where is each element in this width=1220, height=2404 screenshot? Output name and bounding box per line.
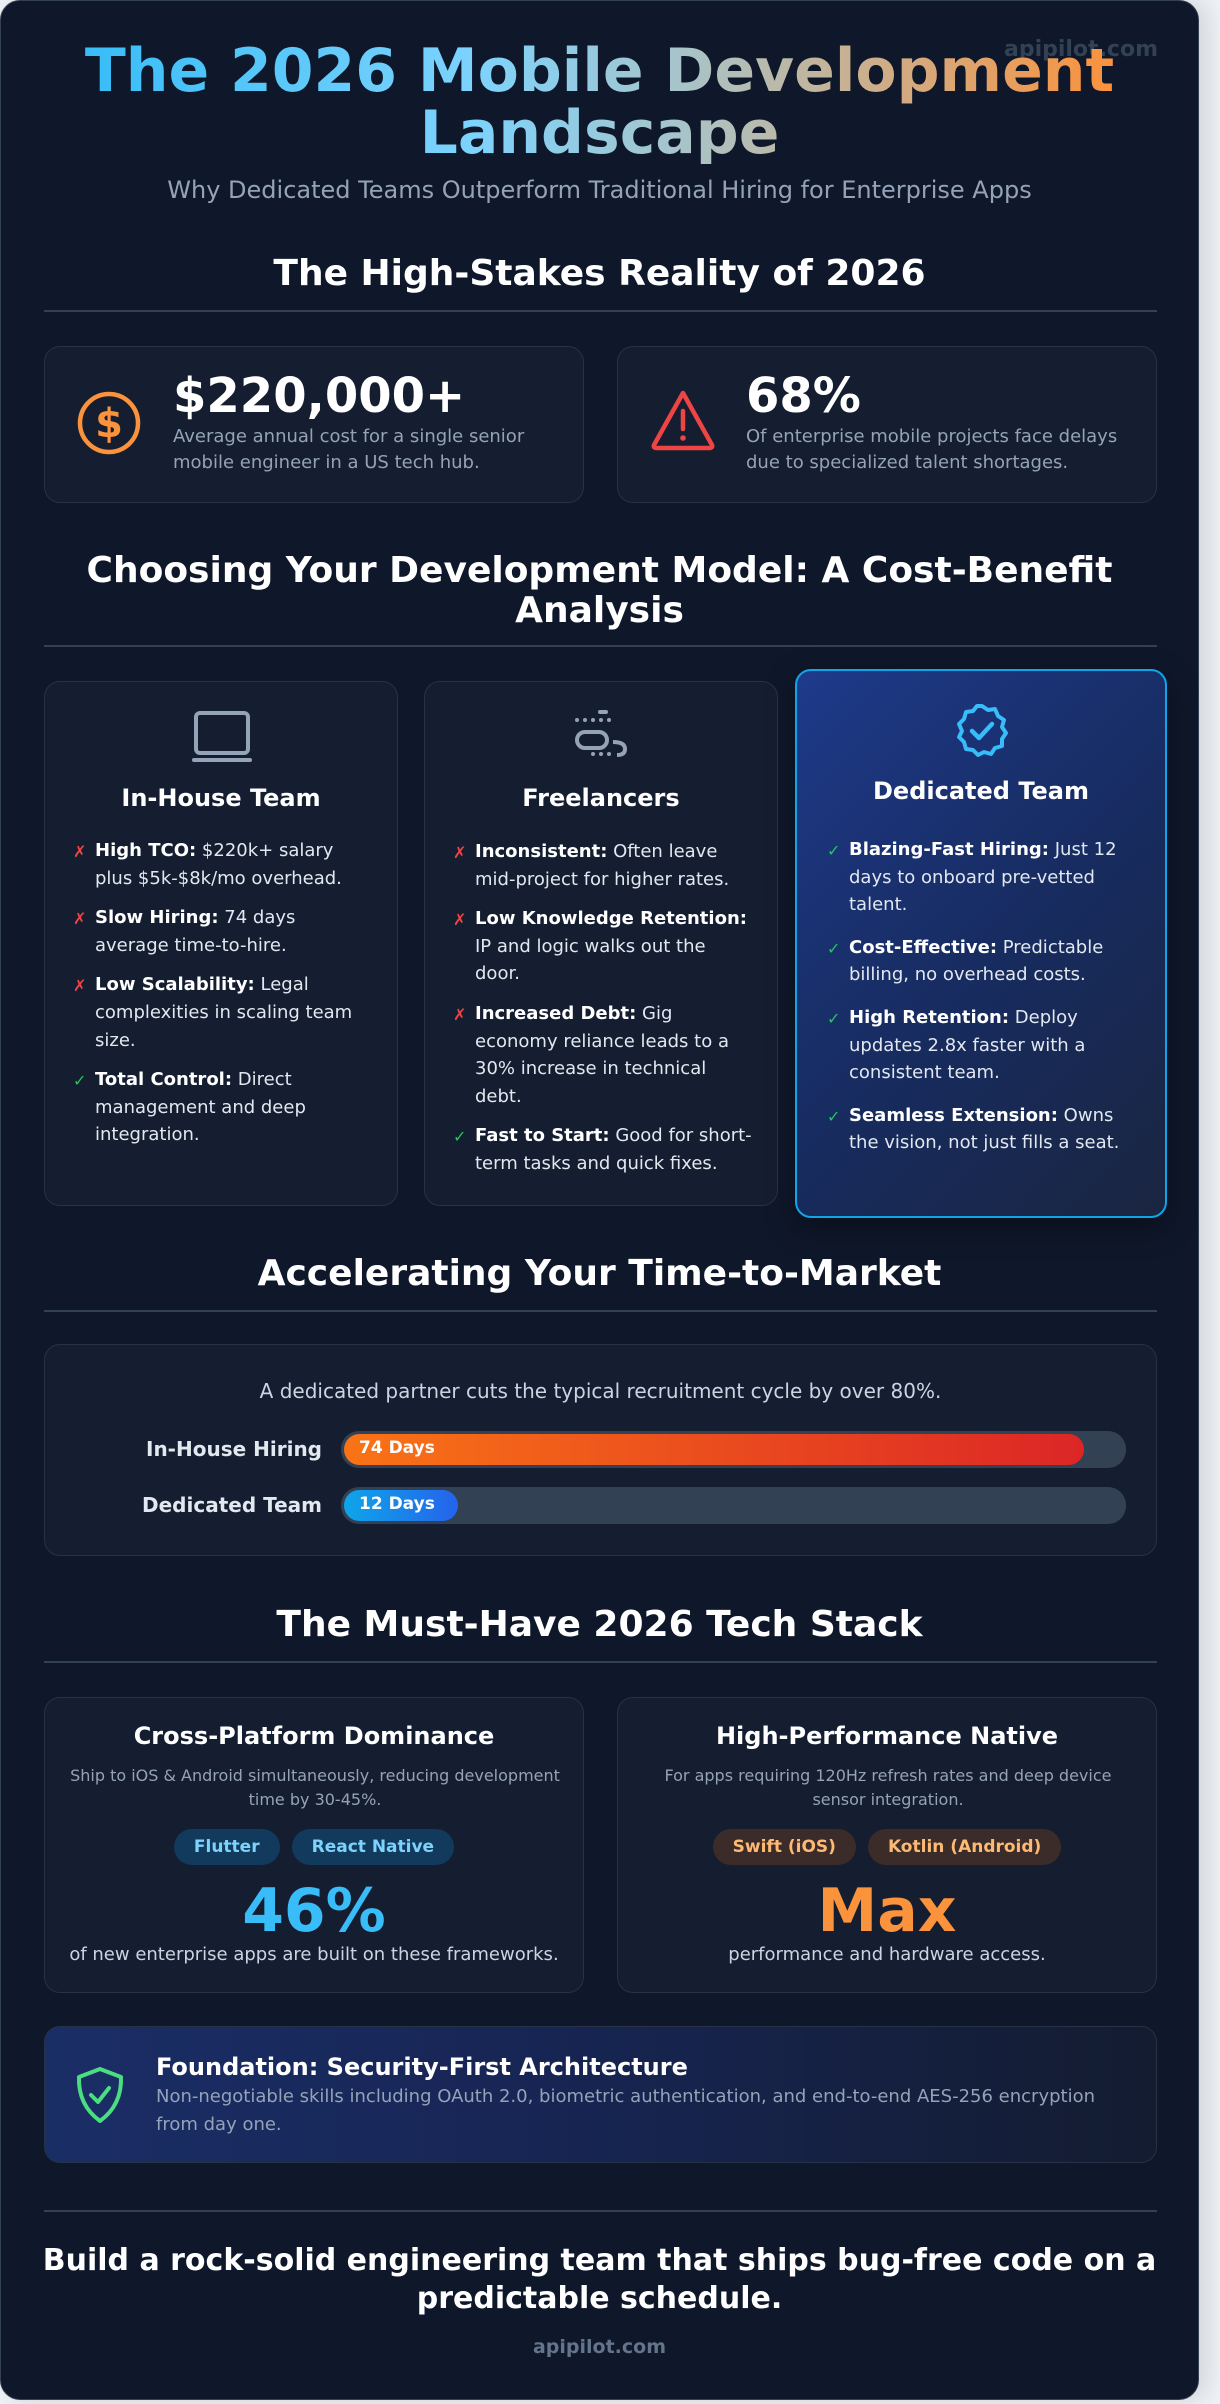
chart caption: A dedicated partner cuts the typical recruitment cycle by over 80%. <box>260 1379 941 1403</box>
description: For apps requiring 120Hz refresh rates and deep device sensor integration. <box>664 1766 1111 1809</box>
list: ✓ <box>827 1107 840 1126</box>
bar: dedicated <box>142 1487 1126 1524</box>
stat value: 68% <box>746 368 861 424</box>
list: Fast to Start: Good for short-term tasks and quick fixes. <box>475 1125 752 1174</box>
list: High TCO: $220k+ salary plus $5k-$8k/mo overhead. <box>95 840 342 889</box>
list: Total Control: Direct management and deep integration. <box>95 1069 306 1145</box>
list <box>827 839 1119 1153</box>
stat text: Average annual cost for a single senior mobile engineer in a US tech hub. <box>173 426 524 473</box>
list: Inconsistent: Often leave mid-project for higher rates. <box>475 841 729 890</box>
icon: verified badge <box>957 704 1008 757</box>
heading: cost-benefit <box>87 550 1112 631</box>
watermark: apipilot.com <box>1004 37 1158 62</box>
list: ✓ <box>453 1127 466 1146</box>
panel: in-house team <box>44 681 398 1206</box>
icon: warning <box>652 390 714 450</box>
icon: laptop <box>192 711 252 762</box>
list: ✗ <box>73 909 86 928</box>
list: ✗ <box>453 843 466 862</box>
title: Landscape <box>420 98 779 168</box>
panel: freelancers <box>424 681 778 1206</box>
closing statement: Build a rock-solid engineering team that ships bug-free code on a <box>43 2243 1156 2278</box>
title <box>85 36 1114 168</box>
title: The 2026 Mobile Development <box>85 36 1114 106</box>
heading: tech stack: The Must-Have 2026 Tech Stack <box>276 1604 923 1645</box>
panel: native <box>617 1697 1157 1993</box>
heading: high-stakes: The High-Stakes Reality of 2026 <box>273 253 926 294</box>
list: High Retention: Deploy updates 2.8x faster with a consistent team. <box>849 1007 1085 1083</box>
list: ✗ <box>73 976 86 995</box>
closing statement: predictable schedule. <box>417 2281 782 2316</box>
icon: broken link <box>575 710 627 757</box>
stat text: Of enterprise mobile projects face delays due to specialized talent shortages. <box>746 426 1117 473</box>
closing statement <box>43 2243 1156 2316</box>
list: Increased Debt: Gig economy reliance leads to a 30% increase in technical debt. <box>475 1003 729 1107</box>
list <box>73 840 352 1145</box>
list: ✓ <box>827 939 840 958</box>
panel: cross-platform <box>44 1697 584 1993</box>
heading: time-to-market: Accelerating Your Time-to-Market <box>258 1253 941 1294</box>
panel: hiring bar chart <box>44 1344 1157 1556</box>
list: Slow Hiring: 74 days average time-to-hire. <box>95 907 295 956</box>
list <box>453 841 752 1174</box>
icon: dollar: $ <box>95 401 123 447</box>
subtitle: Why Dedicated Teams Outperform Traditional Hiring for Enterprise Apps <box>167 176 1032 204</box>
list: Blazing-Fast Hiring: Just 12 days to onboard pre-vetted talent. <box>849 839 1117 915</box>
icon: dollar <box>78 392 140 454</box>
panel: security foundation <box>44 2026 1157 2163</box>
heading: cost-benefit: Choosing Your Development Model: A Cost-Benefit <box>87 550 1112 591</box>
list: ✗ <box>453 910 466 929</box>
heading: cost-benefit: Analysis <box>515 590 684 631</box>
big stat: Max <box>818 1876 956 1946</box>
list: ✗ <box>453 1005 466 1024</box>
list: ✓ <box>827 841 840 860</box>
list: Cost-Effective: Predictable billing, no overhead costs. <box>849 937 1103 985</box>
card title: Freelancers <box>522 784 680 812</box>
card title: Cross-Platform Dominance <box>134 1722 494 1750</box>
stat caption: performance and hardware access. <box>728 1944 1046 1965</box>
list: Low Scalability: Legal complexities in scaling team size. <box>95 974 352 1051</box>
card title: In-House Team <box>121 784 321 812</box>
list: ✗ <box>73 842 86 861</box>
bar: in-house <box>146 1431 1126 1468</box>
pills: Swift (iOS) <box>733 1837 836 1857</box>
pills: Flutter <box>194 1837 260 1857</box>
bar: in-house: 74 Days <box>359 1438 435 1458</box>
description: Ship to iOS & Android simultaneously, reducing development time by 30-45%. <box>70 1766 560 1809</box>
stat card: delays <box>617 346 1157 503</box>
bar: dedicated: Dedicated Team <box>142 1493 322 1517</box>
card title: High-Performance Native <box>716 1722 1058 1750</box>
title: Foundation: Security-First Architecture <box>156 2053 688 2081</box>
bar: in-house: In-House Hiring <box>146 1437 322 1461</box>
list: ✓ <box>827 1009 840 1028</box>
list: Seamless Extension: Owns the vision, not just fills a seat. <box>849 1105 1119 1153</box>
stat card: cost <box>44 346 584 503</box>
panel: dedicated team (highlighted) <box>795 669 1167 1218</box>
stat caption: of new enterprise apps are built on these frameworks. <box>69 1944 559 1965</box>
pills: Kotlin (Android) <box>888 1837 1041 1857</box>
pills <box>174 1829 454 1865</box>
icon: shield <box>77 2067 123 2123</box>
description: Non-negotiable skills including OAuth 2.0, biometric authentication, and end-to-end AES-256 encryption from day one. <box>156 2086 1095 2135</box>
bar: dedicated: 12 Days <box>359 1494 435 1514</box>
list: ✓ <box>73 1071 86 1090</box>
big stat: 46% <box>242 1876 386 1946</box>
pills <box>713 1829 1061 1865</box>
card title: Dedicated Team <box>873 777 1089 805</box>
list: Low Knowledge Retention: IP and logic walks out the door. <box>475 908 747 984</box>
pills: React Native <box>312 1837 434 1857</box>
stat value: $220,000+ <box>173 368 465 424</box>
footer: apipilot.com <box>533 2336 666 2358</box>
